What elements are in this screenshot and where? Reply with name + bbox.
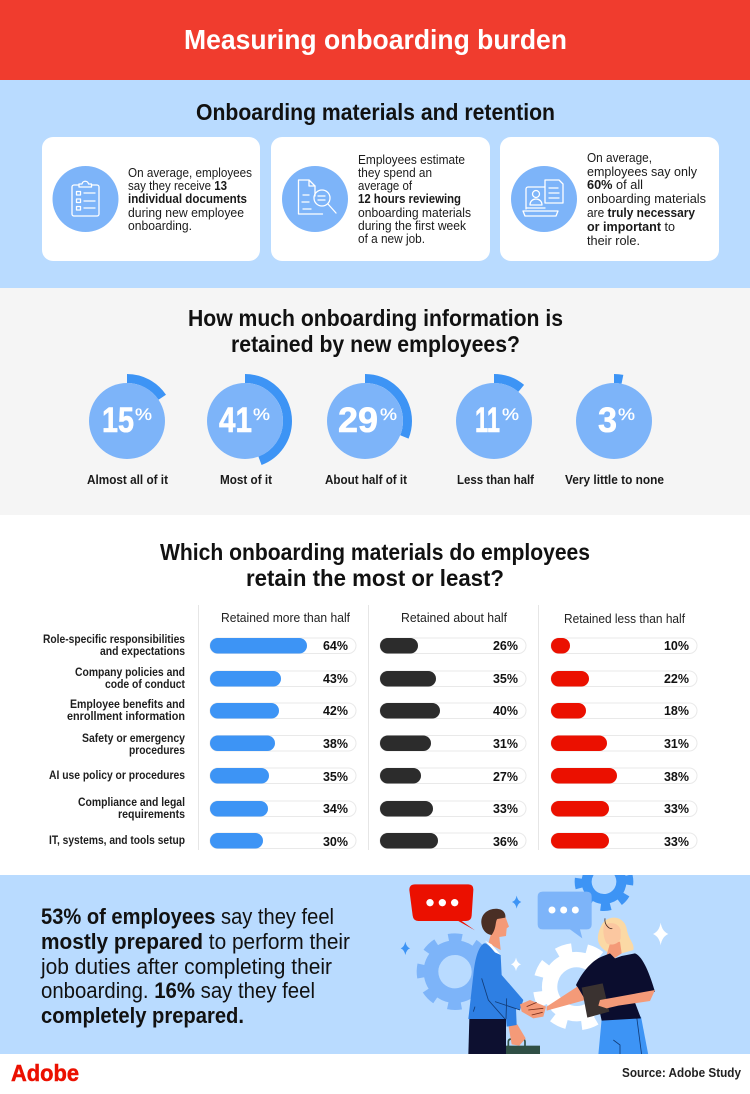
card text: onboarding materials xyxy=(587,191,706,206)
donut: 3 percent very little to none xyxy=(565,378,664,487)
donut: 41 percent most of it: % xyxy=(253,405,270,424)
row: employee benefits: 42% xyxy=(323,704,348,718)
card: necessary materials xyxy=(500,137,719,261)
row: AI use policy xyxy=(49,768,697,784)
row: IT systems and tools: 36% xyxy=(493,835,518,849)
heading: materials retained xyxy=(160,539,590,591)
row: role-specific responsibilities: Role-specific responsibilities xyxy=(43,634,185,646)
row: role-specific responsibilities: and expectations xyxy=(100,646,185,658)
panel: information retained xyxy=(0,288,750,515)
card text: say they receive 13 xyxy=(128,178,227,193)
icon: white gear xyxy=(534,943,604,1030)
heading: materials retained: retain the most or least? xyxy=(246,565,504,591)
card text: On average, employees xyxy=(128,165,252,180)
heading: information retained: retained by new employees? xyxy=(231,331,520,357)
card text: during the first week xyxy=(358,218,466,233)
card text: 60% of all xyxy=(587,177,643,192)
donut: 41 percent most of it: Most of it xyxy=(220,473,273,487)
row: AI use policy: AI use policy or procedures xyxy=(49,770,185,782)
panel: materials retained xyxy=(0,515,750,875)
row: IT systems and tools: 30% xyxy=(323,835,348,849)
heading: onboarding materials: Onboarding materials and retention xyxy=(196,99,555,125)
card text: onboarding materials xyxy=(358,205,471,220)
card: individual documents xyxy=(42,137,260,261)
source note: Source: Adobe Study xyxy=(622,1066,741,1080)
title: Measuring onboarding burden xyxy=(184,24,567,55)
icon: red speech bubble xyxy=(409,884,475,930)
card text: of a new job. xyxy=(358,231,425,246)
heading: information retained xyxy=(188,305,563,357)
card text: 12 hours reviewing xyxy=(358,191,461,206)
callout text: onboarding. 16% say they feel xyxy=(41,978,315,1003)
card text: during new employee xyxy=(128,205,244,220)
row: employee benefits: 40% xyxy=(493,704,518,718)
callout text: 53% of employees say they feel xyxy=(41,904,334,929)
row: safety or emergency: 38% xyxy=(323,737,348,751)
row: AI use policy: 27% xyxy=(493,770,518,784)
icon: document with magnifier xyxy=(282,166,348,232)
donut: 3 percent very little to none: 3 xyxy=(598,401,617,440)
row: safety or emergency: 31% xyxy=(664,737,689,751)
card text: onboarding. xyxy=(128,218,192,233)
icon: blue gear xyxy=(574,875,634,911)
donut: 11 percent less than half: Less than half xyxy=(457,473,535,487)
card: hours reviewing xyxy=(271,137,490,261)
row: IT systems and tools: IT, systems, and tools setup xyxy=(49,835,185,847)
row: compliance and legal: 33% xyxy=(493,802,518,816)
icon: laptop with profile and document xyxy=(511,166,577,232)
row: role-specific responsibilities: 64% xyxy=(323,639,348,653)
row: company policies: 35% xyxy=(493,672,518,686)
donut: 29 percent about half of it: % xyxy=(380,405,397,424)
row: IT systems and tools: 33% xyxy=(664,835,689,849)
woman in dark top xyxy=(520,918,655,1055)
row: company policies: code of conduct xyxy=(105,679,185,691)
icon: light blue gear xyxy=(416,933,482,1010)
row: role-specific responsibilities: 26% xyxy=(493,639,518,653)
row: employee benefits: enrollment information xyxy=(67,711,185,723)
card text xyxy=(358,152,471,246)
column headers: Retained about half xyxy=(401,611,508,625)
row: AI use policy: 38% xyxy=(664,770,689,784)
card text: On average, xyxy=(587,150,652,165)
donut: 15 percent almost all of it: Almost all of it xyxy=(87,473,169,487)
row: employee benefits: Employee benefits and xyxy=(70,699,185,711)
row: compliance and legal: 33% xyxy=(664,802,689,816)
card text: employees say only xyxy=(587,164,697,179)
callout text: completely prepared. xyxy=(41,1003,244,1028)
card text: Employees estimate xyxy=(358,152,465,167)
donut: 29 percent about half of it: About half of it xyxy=(325,473,408,487)
icon: blue speech bubble xyxy=(538,892,592,938)
donut: 29 percent about half of it: 29 xyxy=(338,401,378,440)
panel: preparedness callout xyxy=(0,875,750,1054)
donut: 41 percent most of it: 41 xyxy=(219,401,252,440)
card text: average of xyxy=(358,178,412,193)
heading: materials retained: Which onboarding materials do employees xyxy=(160,539,590,565)
row: safety or emergency xyxy=(82,733,697,757)
row: compliance and legal: 34% xyxy=(323,802,348,816)
card text: individual documents xyxy=(128,191,247,206)
card text xyxy=(128,165,252,233)
row: role-specific responsibilities: 10% xyxy=(664,639,689,653)
donut: 15 percent almost all of it: % xyxy=(135,405,152,424)
donut: 29 percent about half of it xyxy=(322,378,408,487)
card text: are truly necessary xyxy=(587,205,696,220)
row: company policies: 43% xyxy=(323,672,348,686)
callout text xyxy=(40,904,350,1028)
row: AI use policy: 35% xyxy=(323,770,348,784)
callout text: mostly prepared to perform their xyxy=(41,929,350,954)
card text xyxy=(587,150,706,248)
donut: 3 percent very little to none: % xyxy=(618,405,635,424)
row: compliance and legal: requirements xyxy=(118,809,185,821)
illustration: handshake with gears and speech bubbles xyxy=(400,875,668,1054)
row: role-specific responsibilities xyxy=(43,634,697,658)
row: compliance and legal xyxy=(78,797,697,821)
row: safety or emergency: procedures xyxy=(129,745,185,757)
row: company policies: Company policies and xyxy=(75,667,185,679)
row: safety or emergency: Safety or emergency xyxy=(82,733,186,745)
icon: sparkles xyxy=(401,896,668,971)
donut: 11 percent less than half xyxy=(452,378,536,487)
column headers xyxy=(221,611,685,626)
logo: Adobe wordmark: Adobe xyxy=(11,1060,79,1086)
donut: 3 percent very little to none: Very little to none xyxy=(565,473,664,487)
row: compliance and legal: Compliance and legal xyxy=(78,797,185,809)
donut: 41 percent most of it xyxy=(202,378,288,487)
card text: or important to xyxy=(587,219,675,234)
row: company policies: 22% xyxy=(664,672,689,686)
heading: information retained: How much onboarding information is xyxy=(188,305,563,331)
icon: clipboard checklist xyxy=(52,166,118,232)
donut: 15 percent almost all of it: 15 xyxy=(102,401,134,440)
man in blue jacket xyxy=(468,909,540,1056)
row: employee benefits xyxy=(67,699,697,723)
callout text: job duties after completing their xyxy=(40,954,332,979)
row: IT systems and tools xyxy=(49,833,697,849)
card text: their role. xyxy=(587,233,640,248)
donut: 11 percent less than half: 11 xyxy=(475,401,500,440)
row: employee benefits: 18% xyxy=(664,704,689,718)
donut: 15 percent almost all of it xyxy=(84,378,170,487)
panel: onboarding materials and retention xyxy=(0,80,750,288)
column headers: Retained more than half xyxy=(221,611,351,625)
column headers: Retained less than half xyxy=(564,612,685,626)
row: safety or emergency: 31% xyxy=(493,737,518,751)
panel: header banner xyxy=(0,0,750,80)
card text: they spend an xyxy=(358,165,432,180)
row: company policies xyxy=(75,667,697,691)
donut: 11 percent less than half: % xyxy=(502,405,519,424)
